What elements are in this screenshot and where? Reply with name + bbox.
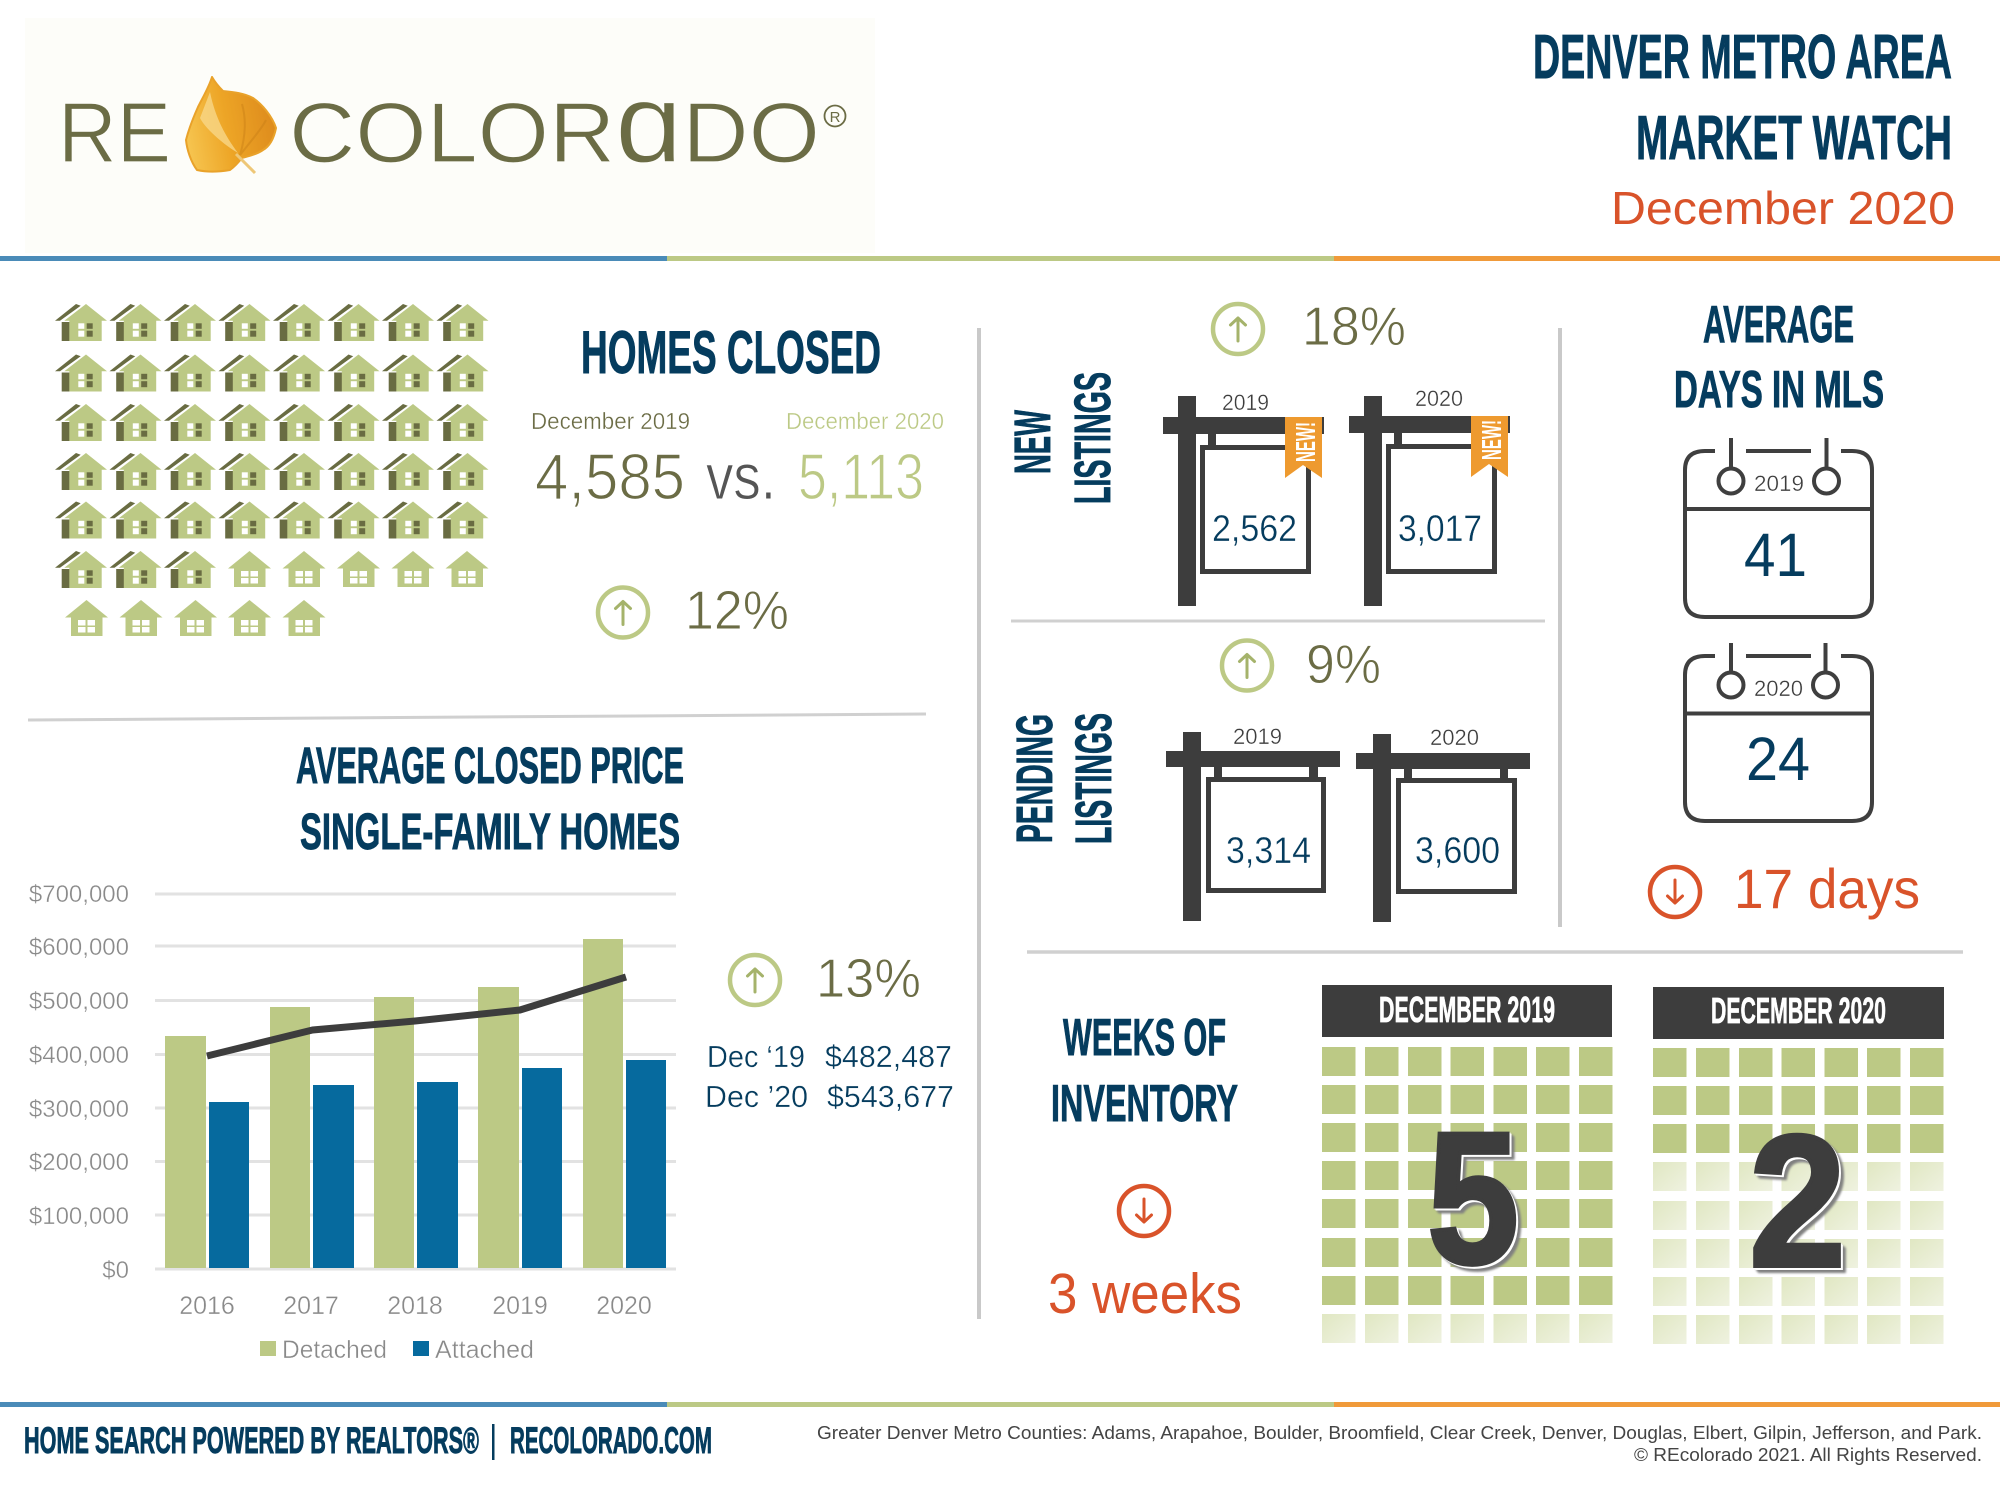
y axis labels: $500,000	[29, 988, 129, 1015]
footer tagline: HOME SEARCH POWERED BY REALTORS®	[24, 1420, 479, 1461]
footer	[24, 1420, 1982, 1465]
icon: sign 2019	[1163, 390, 1324, 606]
x axis labels: 2018	[387, 1292, 443, 1320]
calendar grid: December 2020: DECEMBER 2020	[1711, 990, 1886, 1031]
vertical heading: listings: LISTINGS	[1065, 713, 1122, 844]
icon: sign 2020: 2020	[1430, 725, 1479, 750]
icon: down arrow	[1650, 867, 1700, 917]
y axis labels	[29, 881, 129, 1284]
y axis labels: $600,000	[29, 934, 129, 961]
icon: sign 2019: 2,562	[1212, 508, 1297, 549]
icon: calendar 2019: 41	[1744, 521, 1807, 589]
footer counties note: Greater Denver Metro Counties: Adams, Arapahoe, Boulder, Broomfield, Clear Creek, Denver, Douglas, Elbert, Gilpin, Jefferson, and Park.	[817, 1422, 1982, 1443]
trend line	[207, 977, 626, 1056]
icon: sign 2020: 3,017	[1398, 508, 1482, 549]
value: 2020 homes closed: 5,113	[798, 440, 924, 513]
days change: 17 days	[1734, 857, 1920, 920]
y axis labels: $400,000	[29, 1042, 129, 1069]
icon: sign 2020: 3,600	[1415, 830, 1500, 871]
x axis labels	[179, 1292, 652, 1320]
percent change: 9%	[1306, 633, 1381, 695]
x axis labels: 2016	[179, 1292, 235, 1320]
percent change: 12%	[685, 579, 789, 641]
icon: calendar 2020: 2020	[1754, 676, 1803, 701]
legend	[260, 1336, 534, 1364]
heading line 1: AVERAGE	[1703, 296, 1854, 354]
icon: sign 2020	[1356, 725, 1530, 922]
y axis labels: $300,000	[29, 1096, 129, 1123]
icon: sign 2020: NEW!	[1476, 420, 1507, 460]
icon: up arrow	[598, 588, 648, 638]
label: December 2020: December 2020	[786, 408, 944, 434]
price comparison: Dec ‘19	[707, 1039, 805, 1074]
vertical heading: new: NEW	[1004, 410, 1061, 474]
x axis labels: 2019	[492, 1292, 548, 1320]
heading line 2: SINGLE-FAMILY HOMES	[300, 803, 680, 860]
heading line 1: AVERAGE CLOSED PRICE	[296, 737, 684, 794]
icon: up arrow	[1213, 304, 1263, 354]
attached bars	[209, 1060, 666, 1268]
percent change: 13%	[816, 947, 921, 1009]
top rule	[0, 256, 2000, 261]
logo text: RE: RE	[58, 86, 171, 181]
y axis labels: $0	[102, 1257, 129, 1284]
logo text: COLORADO: COLORɑDO	[289, 61, 820, 186]
big number 2: 2	[1749, 1096, 1846, 1306]
value: 2019 homes closed: 4,585	[535, 440, 685, 513]
bar chart	[29, 881, 676, 1364]
date: December 2020	[1611, 182, 1955, 234]
price comparison: Dec ’20	[705, 1079, 808, 1114]
icon: sign 2020: 2020	[1415, 386, 1463, 411]
icon: sign 2019: 2019	[1222, 390, 1269, 415]
icon: sign 2019: 3,314	[1226, 830, 1311, 871]
icon: calendar 2020: 24	[1746, 725, 1810, 793]
icon: calendar 2020	[1685, 643, 1872, 821]
divider	[28, 714, 926, 720]
icon: up arrow	[1222, 640, 1272, 690]
heading line 2: DAYS IN MLS	[1674, 361, 1884, 419]
panel: pending listings	[1006, 633, 1530, 922]
icon: sign 2019	[1166, 724, 1340, 921]
icon: sign 2019: 2019	[1233, 724, 1282, 749]
legend: Detached	[282, 1336, 387, 1364]
divider	[1027, 950, 1963, 954]
footer separator	[492, 1424, 494, 1460]
calendar grid: December 2019: DECEMBER 2019	[1379, 989, 1555, 1030]
panel: weeks of inventory	[1048, 985, 1944, 1344]
vertical heading: pending: PENDING	[1006, 714, 1063, 843]
label: December 2019: December 2019	[531, 408, 690, 434]
header: title block	[1533, 23, 1955, 234]
heading line 1: WEEKS OF	[1063, 1009, 1226, 1067]
footer copyright: © REcolorado 2021. All Rights Reserved.	[1634, 1444, 1982, 1465]
percent change: 18%	[1302, 295, 1406, 357]
icon: calendar 2019	[1685, 438, 1872, 617]
icon: house grid	[55, 304, 488, 636]
calendar grid: December 2020	[1653, 987, 1944, 1344]
price comparison	[705, 1039, 954, 1114]
divider	[1558, 328, 1562, 927]
registered mark: R	[830, 109, 841, 126]
panel: new listings	[1004, 295, 1510, 606]
price comparison: $482,487	[825, 1039, 952, 1074]
calendar grid: December 2019	[1322, 985, 1612, 1343]
panel: average closed price	[29, 737, 954, 1364]
price comparison: $543,677	[827, 1079, 954, 1114]
icon: aspen leaf	[186, 77, 276, 173]
icon: up arrow	[730, 955, 780, 1005]
x axis labels: 2017	[283, 1292, 339, 1320]
icon: sign 2019: NEW!	[1290, 422, 1321, 462]
divider	[1011, 620, 1545, 622]
y axis labels: $100,000	[29, 1203, 129, 1230]
icon: calendar 2019: 2019	[1754, 471, 1804, 496]
weeks change: 3 weeks	[1048, 1262, 1242, 1326]
header: logo	[25, 18, 875, 253]
panel: homes closed	[55, 304, 944, 641]
detached bars	[165, 939, 623, 1268]
legend: Attached	[435, 1336, 534, 1364]
heading: HOMES CLOSED	[581, 319, 881, 386]
footer rule	[0, 1402, 2000, 1407]
heading line 2: INVENTORY	[1051, 1075, 1238, 1133]
footer url: RECOLORADO.COM	[510, 1420, 712, 1461]
vs: vs.	[706, 440, 776, 513]
registered mark	[824, 106, 846, 126]
x axis labels: 2020	[596, 1292, 652, 1320]
vertical heading: listings: LISTINGS	[1064, 372, 1121, 504]
icon: down arrow	[1119, 1186, 1169, 1236]
y axis labels: $700,000	[29, 881, 129, 908]
panel: average days in MLS	[1650, 296, 1920, 920]
big number 5: 5	[1427, 1093, 1519, 1303]
icon: sign 2020	[1349, 386, 1510, 606]
y axis labels: $200,000	[29, 1149, 129, 1176]
